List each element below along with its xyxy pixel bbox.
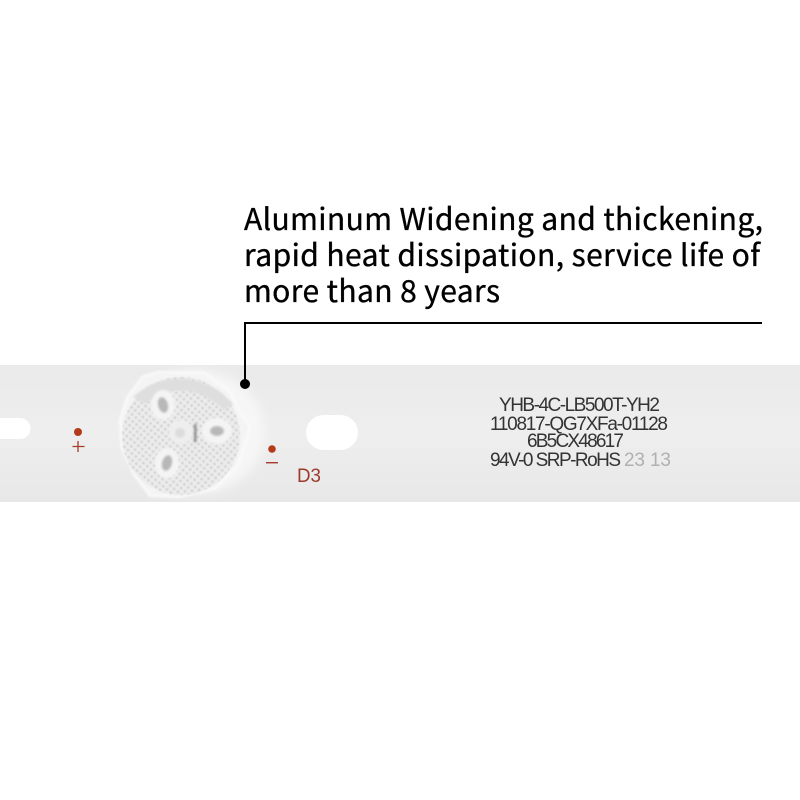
- lens holes: [151, 390, 232, 478]
- callout text: Aluminum Widening and thickening,: [244, 195, 763, 239]
- minus marker right: [266, 445, 278, 463]
- left mounting slot: [0, 418, 30, 439]
- aluminum LED strip: [0, 365, 800, 502]
- callout leader line: [240, 323, 762, 389]
- printed strip codes: [490, 395, 671, 471]
- printed strip codes: 110817-QG7XFa-01128: [490, 414, 668, 435]
- printed strip codes: YHB-4C-LB500T-YH2: [499, 395, 660, 416]
- D3 label: D3: [297, 466, 321, 487]
- callout text: [244, 195, 763, 311]
- printed strip codes: 94V-0 SRP-RoHS: [490, 450, 621, 471]
- printed strip codes: 23 13: [624, 450, 671, 471]
- plus marker left: [72, 428, 84, 452]
- callout text: more than 8 years: [244, 267, 500, 311]
- callout text: rapid heat dissipation, service life of: [244, 231, 761, 275]
- printed strip codes: 6B5CX48617: [527, 431, 624, 452]
- right mounting slot: [306, 415, 358, 450]
- LED lens: [120, 370, 265, 497]
